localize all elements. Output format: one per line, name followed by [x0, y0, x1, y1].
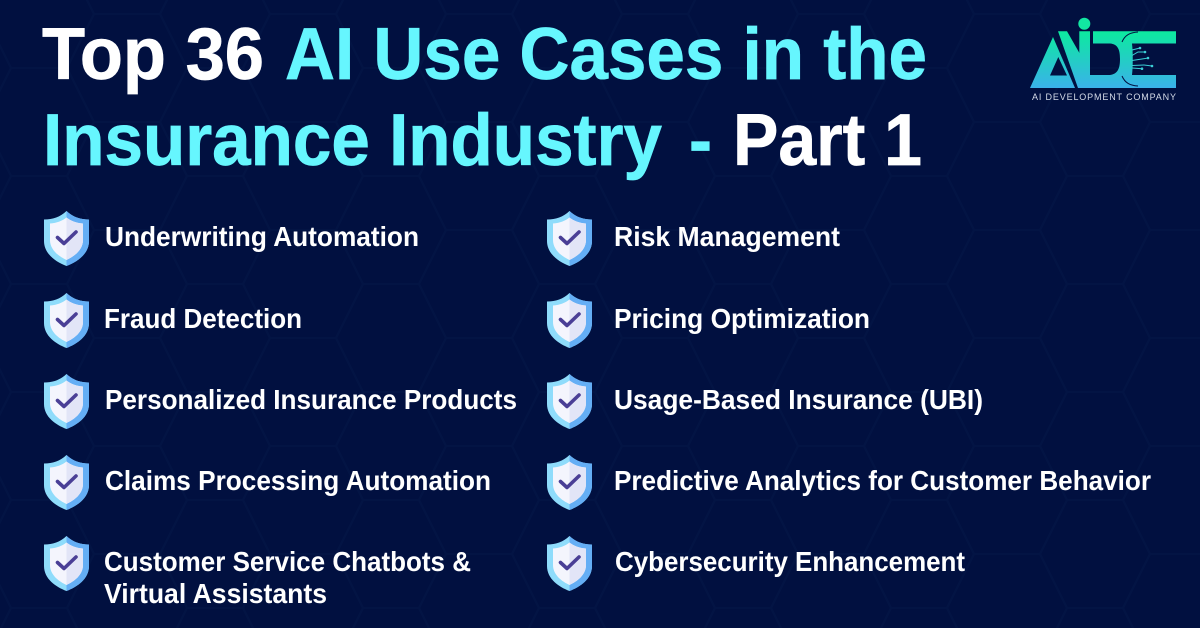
list item: Fraud Detection: Fraud Detection: [104, 303, 302, 334]
title: [42, 14, 927, 181]
list item: Cybersecurity Enhancement: [547, 536, 965, 591]
title: AI Use Cases in the: [285, 14, 927, 95]
list item: Underwriting Automation: [44, 211, 419, 266]
list item: Claims Processing Automation: Claims Processing Automation: [105, 465, 491, 496]
list item: Claims Processing Automation: [44, 455, 491, 510]
list item: Pricing Optimization: [547, 293, 870, 348]
title: Insurance Industry: [43, 100, 662, 181]
list item: Risk Management: [547, 211, 840, 266]
list item: Customer Service Chatbots & Virtual Assistants: [44, 536, 471, 609]
list item: Personalized Insurance Products: Personalized Insurance Products: [105, 384, 517, 415]
title: Part 1: [733, 100, 922, 181]
list item: Underwriting Automation: Underwriting Automation: [105, 221, 419, 252]
list item: Predictive Analytics for Customer Behavior: [547, 455, 1151, 510]
list item: Cybersecurity Enhancement: Cybersecurity Enhancement: [615, 546, 965, 577]
list item: Fraud Detection: [44, 293, 302, 348]
list item: Personalized Insurance Products: [44, 374, 517, 429]
title: -: [689, 100, 712, 181]
list item: Customer Service Chatbots & Virtual Assistants: Virtual Assistants: [104, 578, 327, 609]
logo: AI Development Company: AI DEVELOPMENT COMPANY: [1032, 92, 1176, 102]
list item: Usage-Based Insurance (UBI): [547, 374, 983, 429]
list item: Predictive Analytics for Customer Behavior: Predictive Analytics for Customer Behavior: [614, 465, 1151, 496]
list item: Usage-Based Insurance (UBI): Usage-Based Insurance (UBI): [614, 384, 983, 415]
logo: AI Development Company: [1030, 18, 1176, 102]
list item: Customer Service Chatbots & Virtual Assistants: Customer Service Chatbots &: [104, 546, 471, 577]
list item: Pricing Optimization: Pricing Optimization: [614, 303, 870, 334]
title: Top 36: [42, 14, 264, 95]
list item: Risk Management: Risk Management: [614, 221, 840, 252]
